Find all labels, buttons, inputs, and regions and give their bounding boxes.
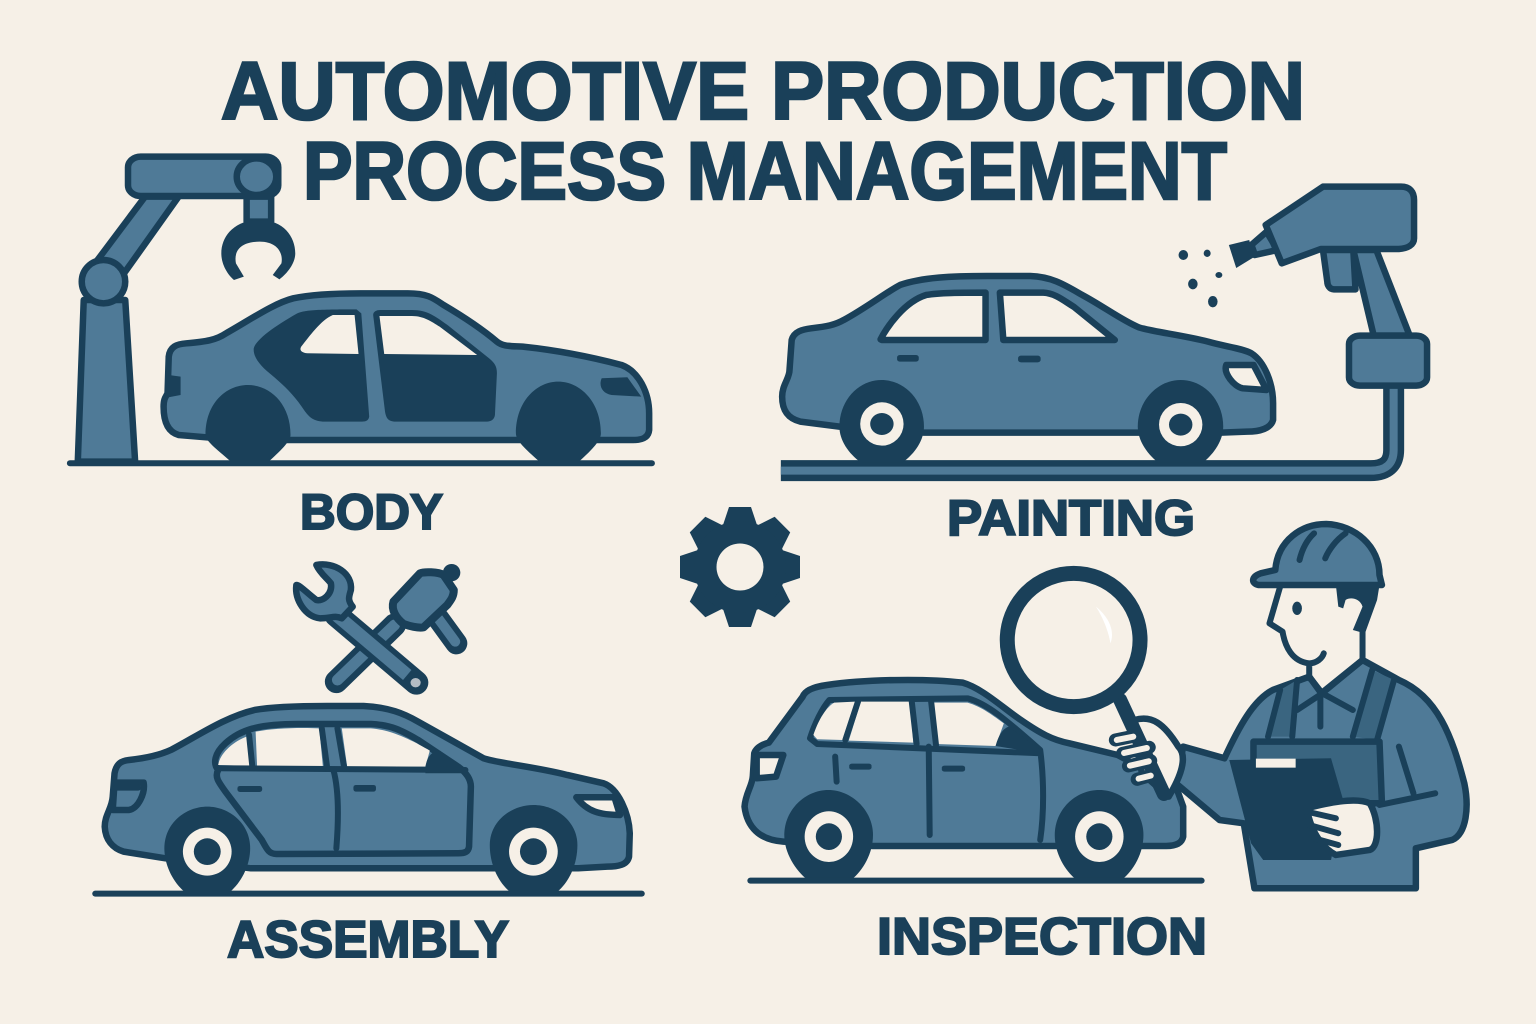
icon: paint pipe and rail: [781, 383, 1394, 471]
panel: assembly stage: [95, 564, 642, 894]
label: assembly: ASSEMBLY: [227, 911, 509, 969]
panel: body stage: [70, 157, 652, 463]
panel: inspection stage: [745, 524, 1467, 888]
icon: assembly car: [105, 706, 630, 894]
icon: inspector worker: [1176, 524, 1467, 888]
icon: inspected car: [745, 680, 1183, 880]
title: PROCESS MANAGEMENT: [303, 126, 1227, 217]
icon: robot arm with gripper: [78, 157, 295, 462]
icon: paint droplets: [1179, 250, 1222, 307]
label: painting: PAINTING: [947, 490, 1195, 546]
icon: central gear: [680, 507, 800, 627]
label: body: BODY: [300, 484, 443, 540]
icon: magnifying glass: [1007, 573, 1183, 797]
label: inspection: INSPECTION: [877, 908, 1207, 966]
icon: crossed wrench and drill: [296, 564, 460, 687]
panel: painting stage: [781, 187, 1427, 471]
ground line: [70, 460, 652, 466]
icon: spray robot: [1229, 187, 1427, 386]
icon: painted car: [782, 276, 1273, 463]
ground line: [750, 878, 1202, 884]
title: [221, 46, 1305, 217]
title: AUTOMOTIVE PRODUCTION: [221, 46, 1305, 137]
icon: car body shell: [164, 293, 649, 463]
ground line: [95, 891, 642, 897]
